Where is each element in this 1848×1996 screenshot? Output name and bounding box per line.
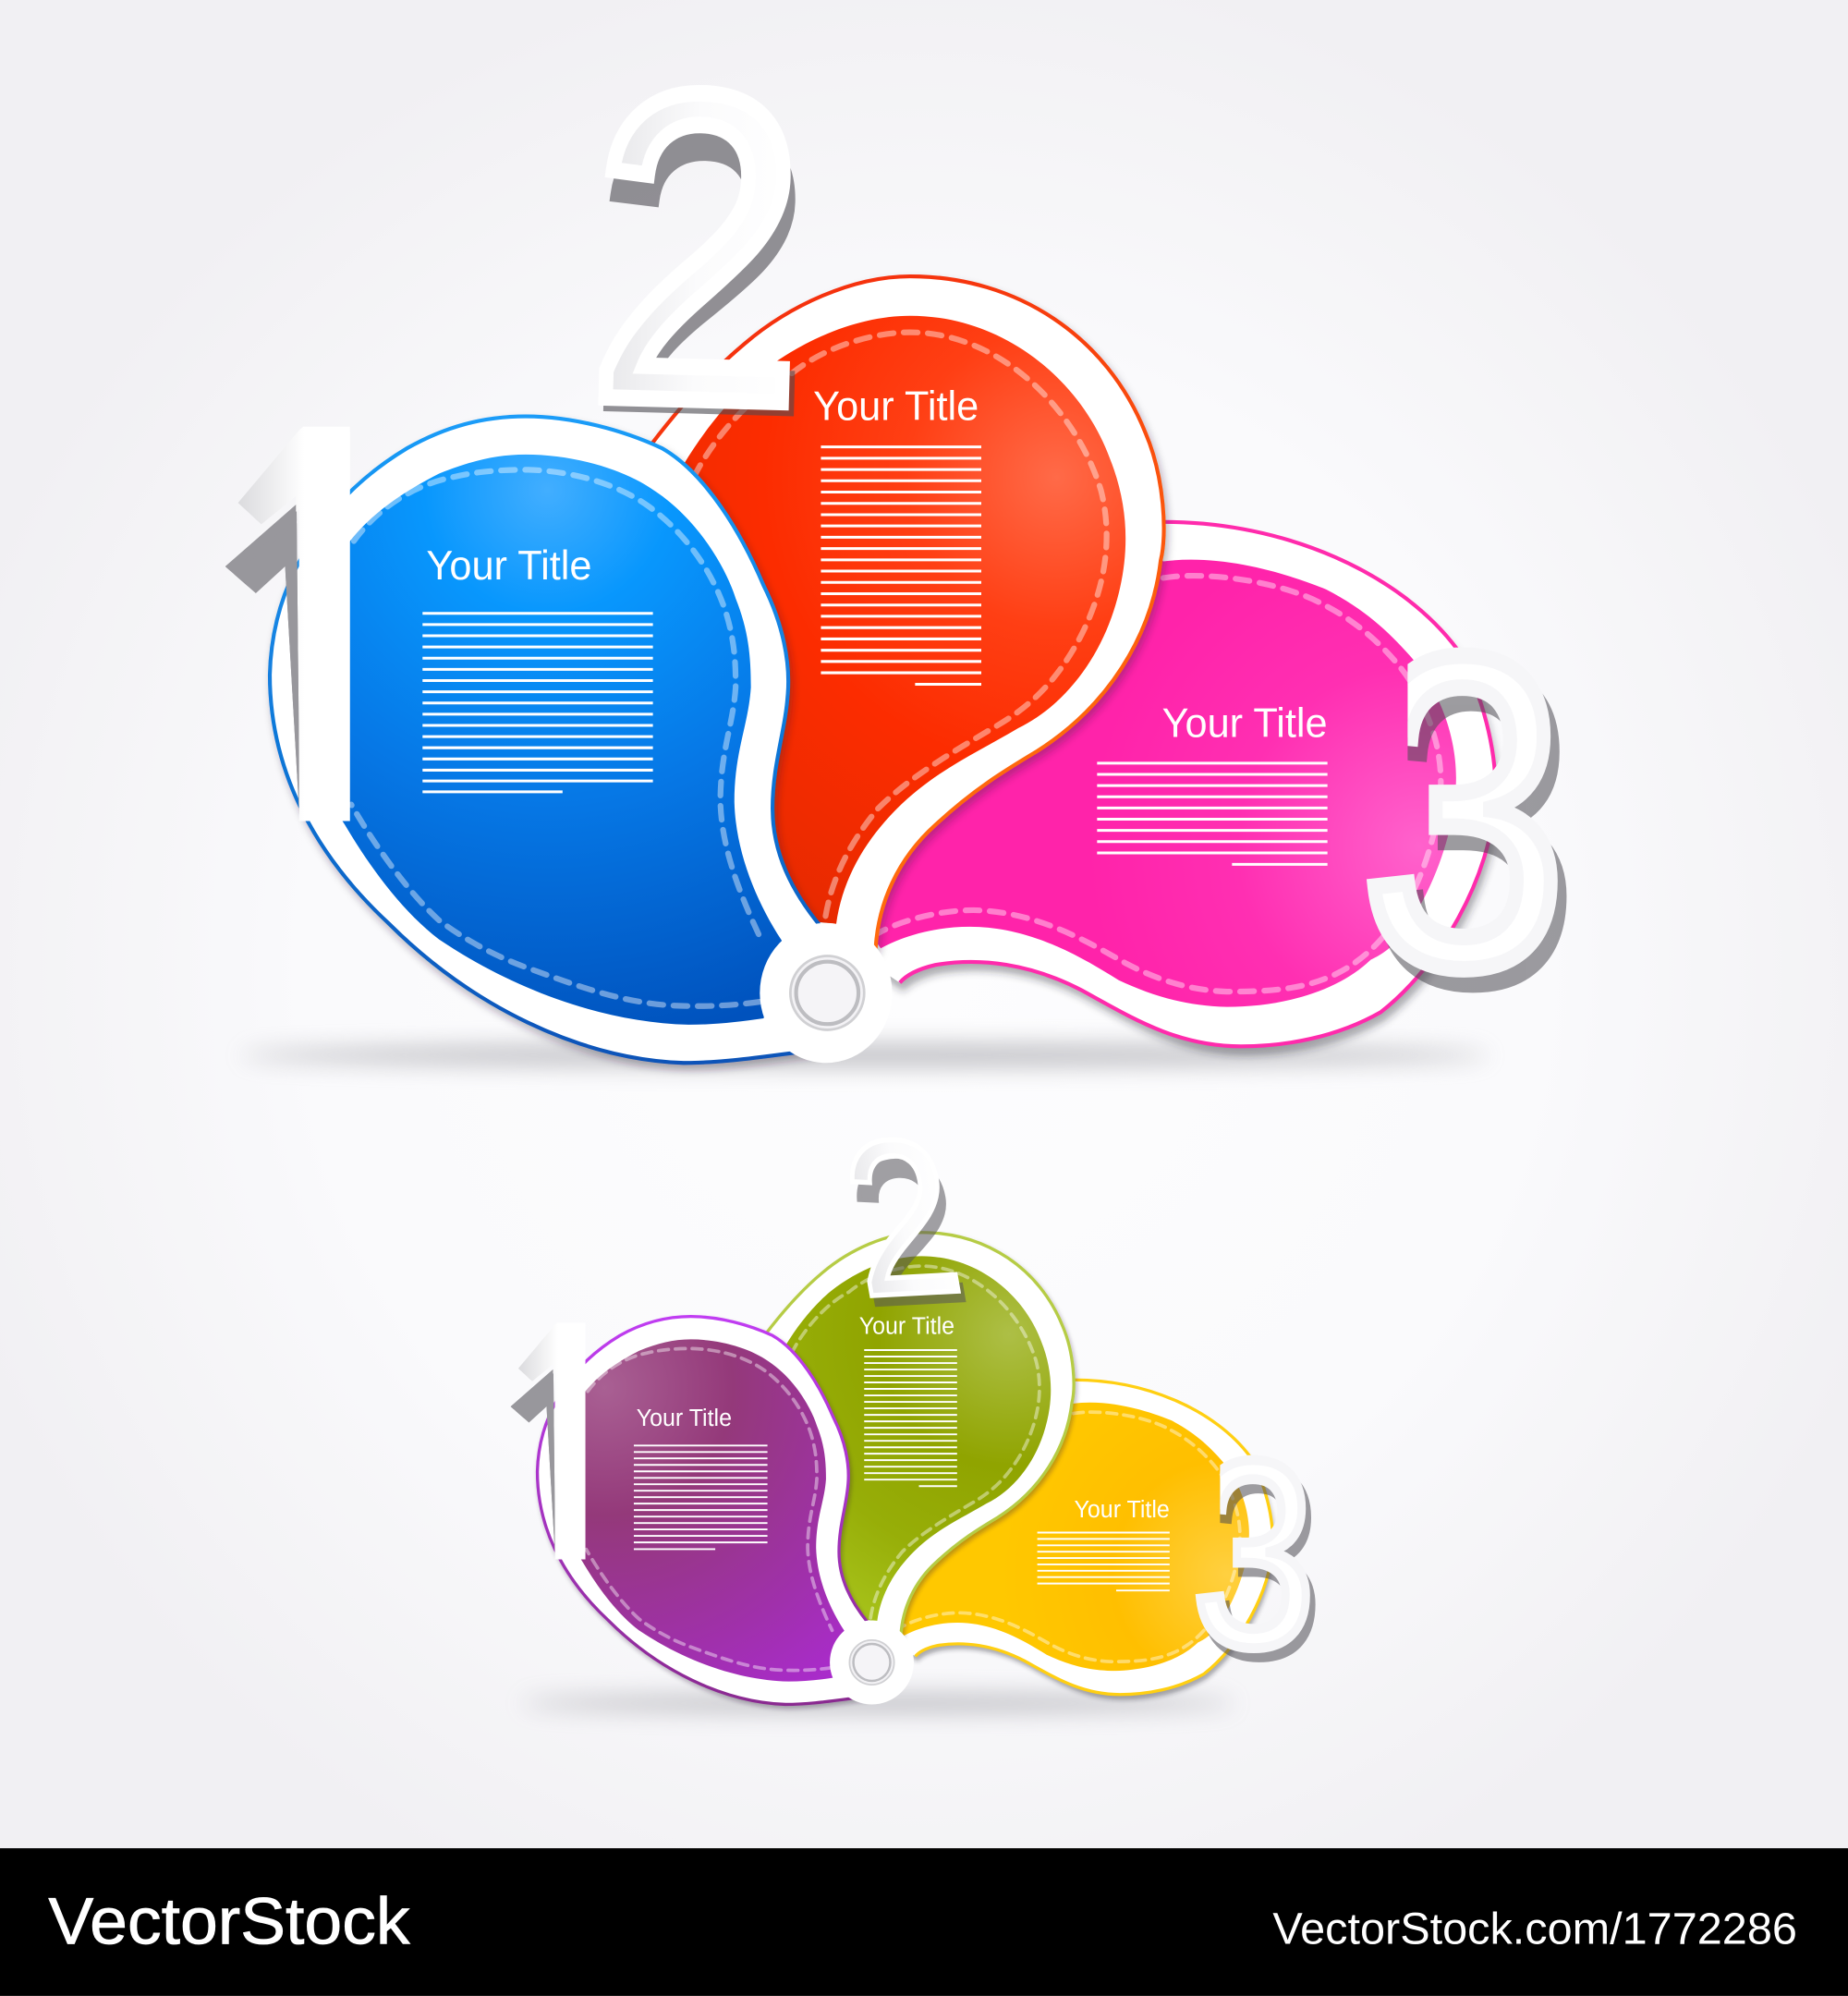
panel: step 2 red bubble	[650, 276, 1164, 968]
text block: green bubble lines	[864, 1350, 957, 1486]
panel: step 1 blue bubble	[270, 417, 821, 1063]
number 3: 3	[1360, 564, 1567, 1059]
icon: connector ring	[830, 1621, 914, 1704]
heading: yellow bubble title: Your Title	[1075, 1495, 1170, 1523]
number 1: 1	[460, 1284, 651, 1719]
ground shadow: small diagram	[522, 1694, 1234, 1712]
panel: step 2 green bubble	[766, 1233, 1074, 1647]
panel: step 3 pink bubble	[840, 522, 1496, 1046]
footer image id: VectorStock.com/1772286	[1272, 1904, 1797, 1953]
number 3	[1196, 1454, 1316, 1662]
number 1: 1	[469, 1243, 660, 1677]
number 2: 2	[590, 38, 816, 495]
number 1	[510, 1337, 586, 1560]
heading: purple bubble title: Your Title	[637, 1404, 732, 1431]
number 3: 3	[1197, 1416, 1321, 1711]
number 2: 2	[835, 1117, 980, 1348]
heading: pink bubble title: Your Title	[1162, 701, 1328, 747]
text block: pink bubble lines	[1097, 763, 1328, 864]
text block: purple bubble lines	[634, 1445, 768, 1549]
number 2: 2	[827, 1092, 977, 1343]
number 3	[1367, 647, 1567, 992]
number 1	[225, 427, 350, 821]
heading: green bubble title: Your Title	[859, 1312, 954, 1340]
bubbles scaled	[538, 1233, 1272, 1704]
number 1: 1	[141, 361, 459, 1087]
footer brand: VectorStock	[48, 1884, 410, 1958]
heading: blue bubble title: Your Title	[426, 543, 591, 589]
ground shadow: large diagram	[242, 1044, 1489, 1066]
text block: blue bubble lines	[422, 614, 653, 792]
text block: yellow bubble lines	[1038, 1533, 1170, 1590]
icon: connector ring	[760, 923, 893, 1063]
text block: red bubble lines	[821, 447, 981, 684]
large diagram: three step bubbles	[141, 0, 1576, 1087]
number 3: 3	[1192, 1406, 1316, 1703]
heading: red bubble title: Your Title	[813, 384, 979, 430]
number 1: 1	[157, 292, 475, 1016]
panel: step 1 purple bubble	[538, 1317, 868, 1704]
small diagram: three step bubbles	[460, 1092, 1321, 1719]
number 2: 2	[584, 0, 811, 495]
number 3: 3	[1369, 578, 1576, 1075]
footer bar	[0, 1848, 1848, 1996]
panel: step 3 yellow bubble	[880, 1380, 1272, 1695]
